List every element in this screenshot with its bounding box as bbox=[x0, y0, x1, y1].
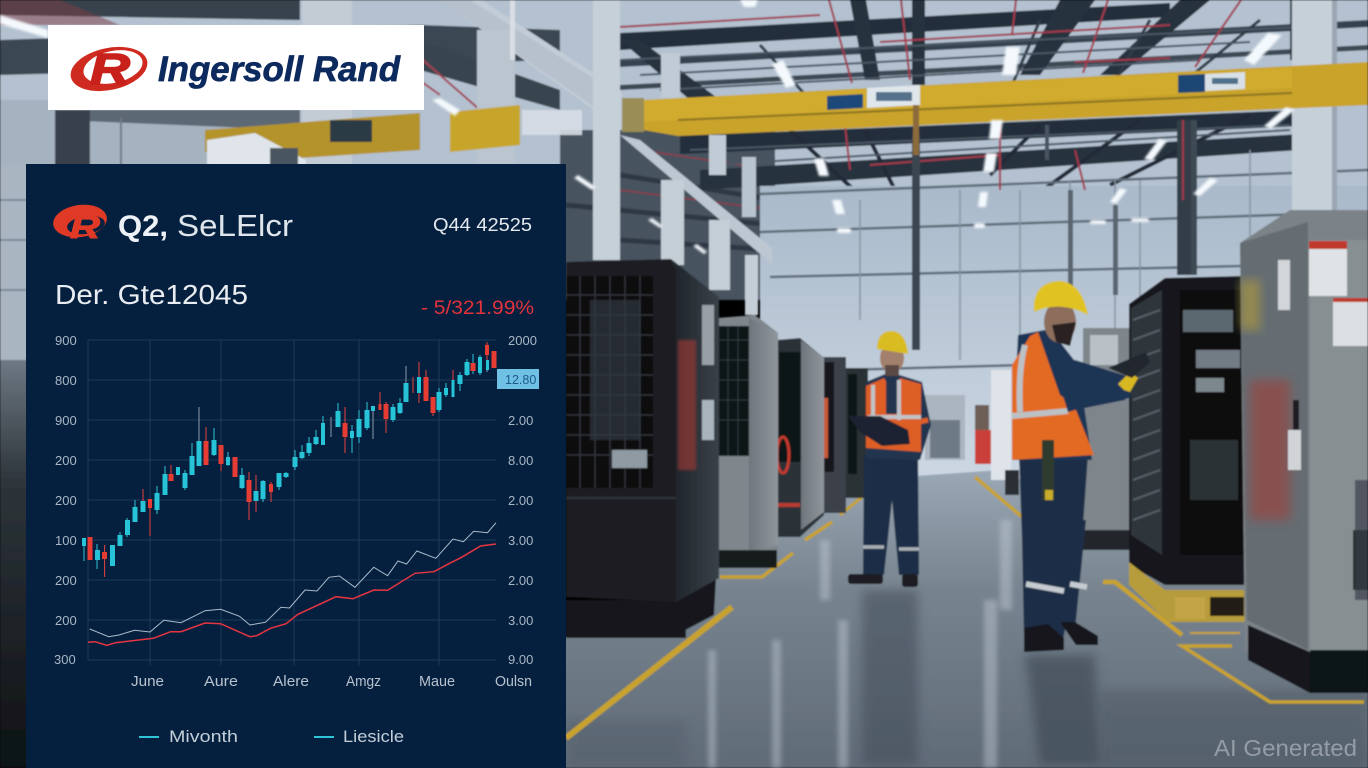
cabinet 5 bbox=[845, 368, 868, 498]
right axis labels: 3.00 bbox=[508, 533, 533, 548]
white trend line bbox=[90, 523, 496, 637]
right axis labels: 9.00 bbox=[508, 652, 533, 667]
trousers bbox=[1019, 455, 1088, 640]
right axis labels: 2.00 bbox=[508, 493, 533, 508]
wordmark: Ingersoll Rand bbox=[158, 50, 401, 89]
period label: Q44 42525 bbox=[433, 215, 532, 235]
month labels: Aure bbox=[204, 673, 238, 690]
AI Generated watermark: AI Generated bbox=[1214, 735, 1357, 761]
left axis labels: 100 bbox=[55, 533, 77, 548]
far end of the aisle bbox=[925, 370, 1019, 495]
left axis labels: 200 bbox=[55, 453, 77, 468]
percent change: - 5/321.99% bbox=[421, 298, 534, 319]
worker with tablet bbox=[848, 331, 931, 587]
left edge machinery bbox=[0, 165, 30, 768]
cabinet 2 bbox=[717, 315, 778, 568]
right axis labels: 2.00 bbox=[508, 413, 533, 428]
icon: panel R logo: R bbox=[70, 209, 100, 245]
icon: panel R logo bbox=[51, 201, 109, 245]
large gray cabinet at right edge bbox=[1240, 210, 1368, 693]
panel heading: Q2, bbox=[118, 210, 168, 243]
chart gridlines bbox=[88, 340, 496, 665]
floor reflections bbox=[708, 520, 1012, 768]
right axis labels: 8.00 bbox=[508, 453, 533, 468]
month labels: Amgz bbox=[346, 673, 381, 690]
legend item one: Mivonth bbox=[169, 727, 238, 746]
left axis labels: 200 bbox=[55, 613, 77, 628]
cabinet 1 bbox=[566, 259, 719, 638]
back wall bbox=[760, 120, 1368, 486]
right axis labels: 2.00 bbox=[508, 573, 533, 588]
cabinet 3 bbox=[777, 338, 824, 537]
panel: stock chart: SeLElcr bbox=[177, 208, 293, 243]
white machine at rear left bbox=[207, 133, 306, 170]
current value tag bbox=[497, 369, 539, 389]
subheading: Der. Gte12045 bbox=[55, 279, 248, 310]
red trend line bbox=[88, 544, 496, 645]
foreground worker in hard hat bbox=[1012, 281, 1150, 652]
current value tag: 12.80 bbox=[505, 373, 536, 387]
red candle bodies bbox=[88, 345, 496, 560]
foreground black cabinet on pallet bbox=[1129, 276, 1246, 622]
cabinet 4 bbox=[820, 357, 846, 513]
right axis labels: 2000 bbox=[508, 333, 537, 348]
row of compressor cabinets bbox=[566, 259, 868, 638]
factory floor bbox=[560, 470, 1368, 768]
legend item two bbox=[314, 727, 404, 746]
panel: stock chart bbox=[26, 164, 566, 768]
month labels: Alere bbox=[273, 673, 309, 690]
legend item two: Liesicle bbox=[343, 727, 404, 746]
left axis labels: 800 bbox=[55, 373, 77, 388]
yellow floor lines bbox=[566, 477, 1364, 738]
ceiling lights bbox=[0, 0, 1295, 254]
yellow overhead crane bbox=[205, 62, 1368, 160]
icon: red R swoosh logo: R bbox=[90, 45, 130, 94]
structural columns and gantry bbox=[302, 0, 1337, 315]
right axis labels: 3.00 bbox=[508, 613, 533, 628]
left axis labels: 200 bbox=[55, 573, 77, 588]
left axis labels: 900 bbox=[55, 413, 77, 428]
left axis labels: 300 bbox=[54, 652, 76, 667]
left axis labels bbox=[54, 333, 77, 667]
month labels: Oulsn bbox=[495, 673, 532, 690]
month labels: June bbox=[131, 673, 164, 690]
legend bbox=[139, 727, 404, 746]
right edge dark handle bbox=[1355, 480, 1368, 600]
legend item one bbox=[139, 727, 238, 746]
right axis labels bbox=[508, 333, 537, 667]
left axis labels: 900 bbox=[55, 333, 77, 348]
month labels bbox=[131, 673, 532, 690]
cyan candle bodies bbox=[82, 357, 489, 566]
ceiling bbox=[0, 0, 1368, 300]
month labels: Maue bbox=[419, 673, 455, 690]
candlestick and line chart bbox=[54, 333, 539, 690]
candle wicks bbox=[84, 342, 487, 577]
rear gray cabinet bbox=[1083, 328, 1131, 550]
icon: red R swoosh logo bbox=[66, 40, 152, 98]
left axis labels: 200 bbox=[55, 493, 77, 508]
Ingersoll Rand logo plate bbox=[48, 25, 424, 110]
